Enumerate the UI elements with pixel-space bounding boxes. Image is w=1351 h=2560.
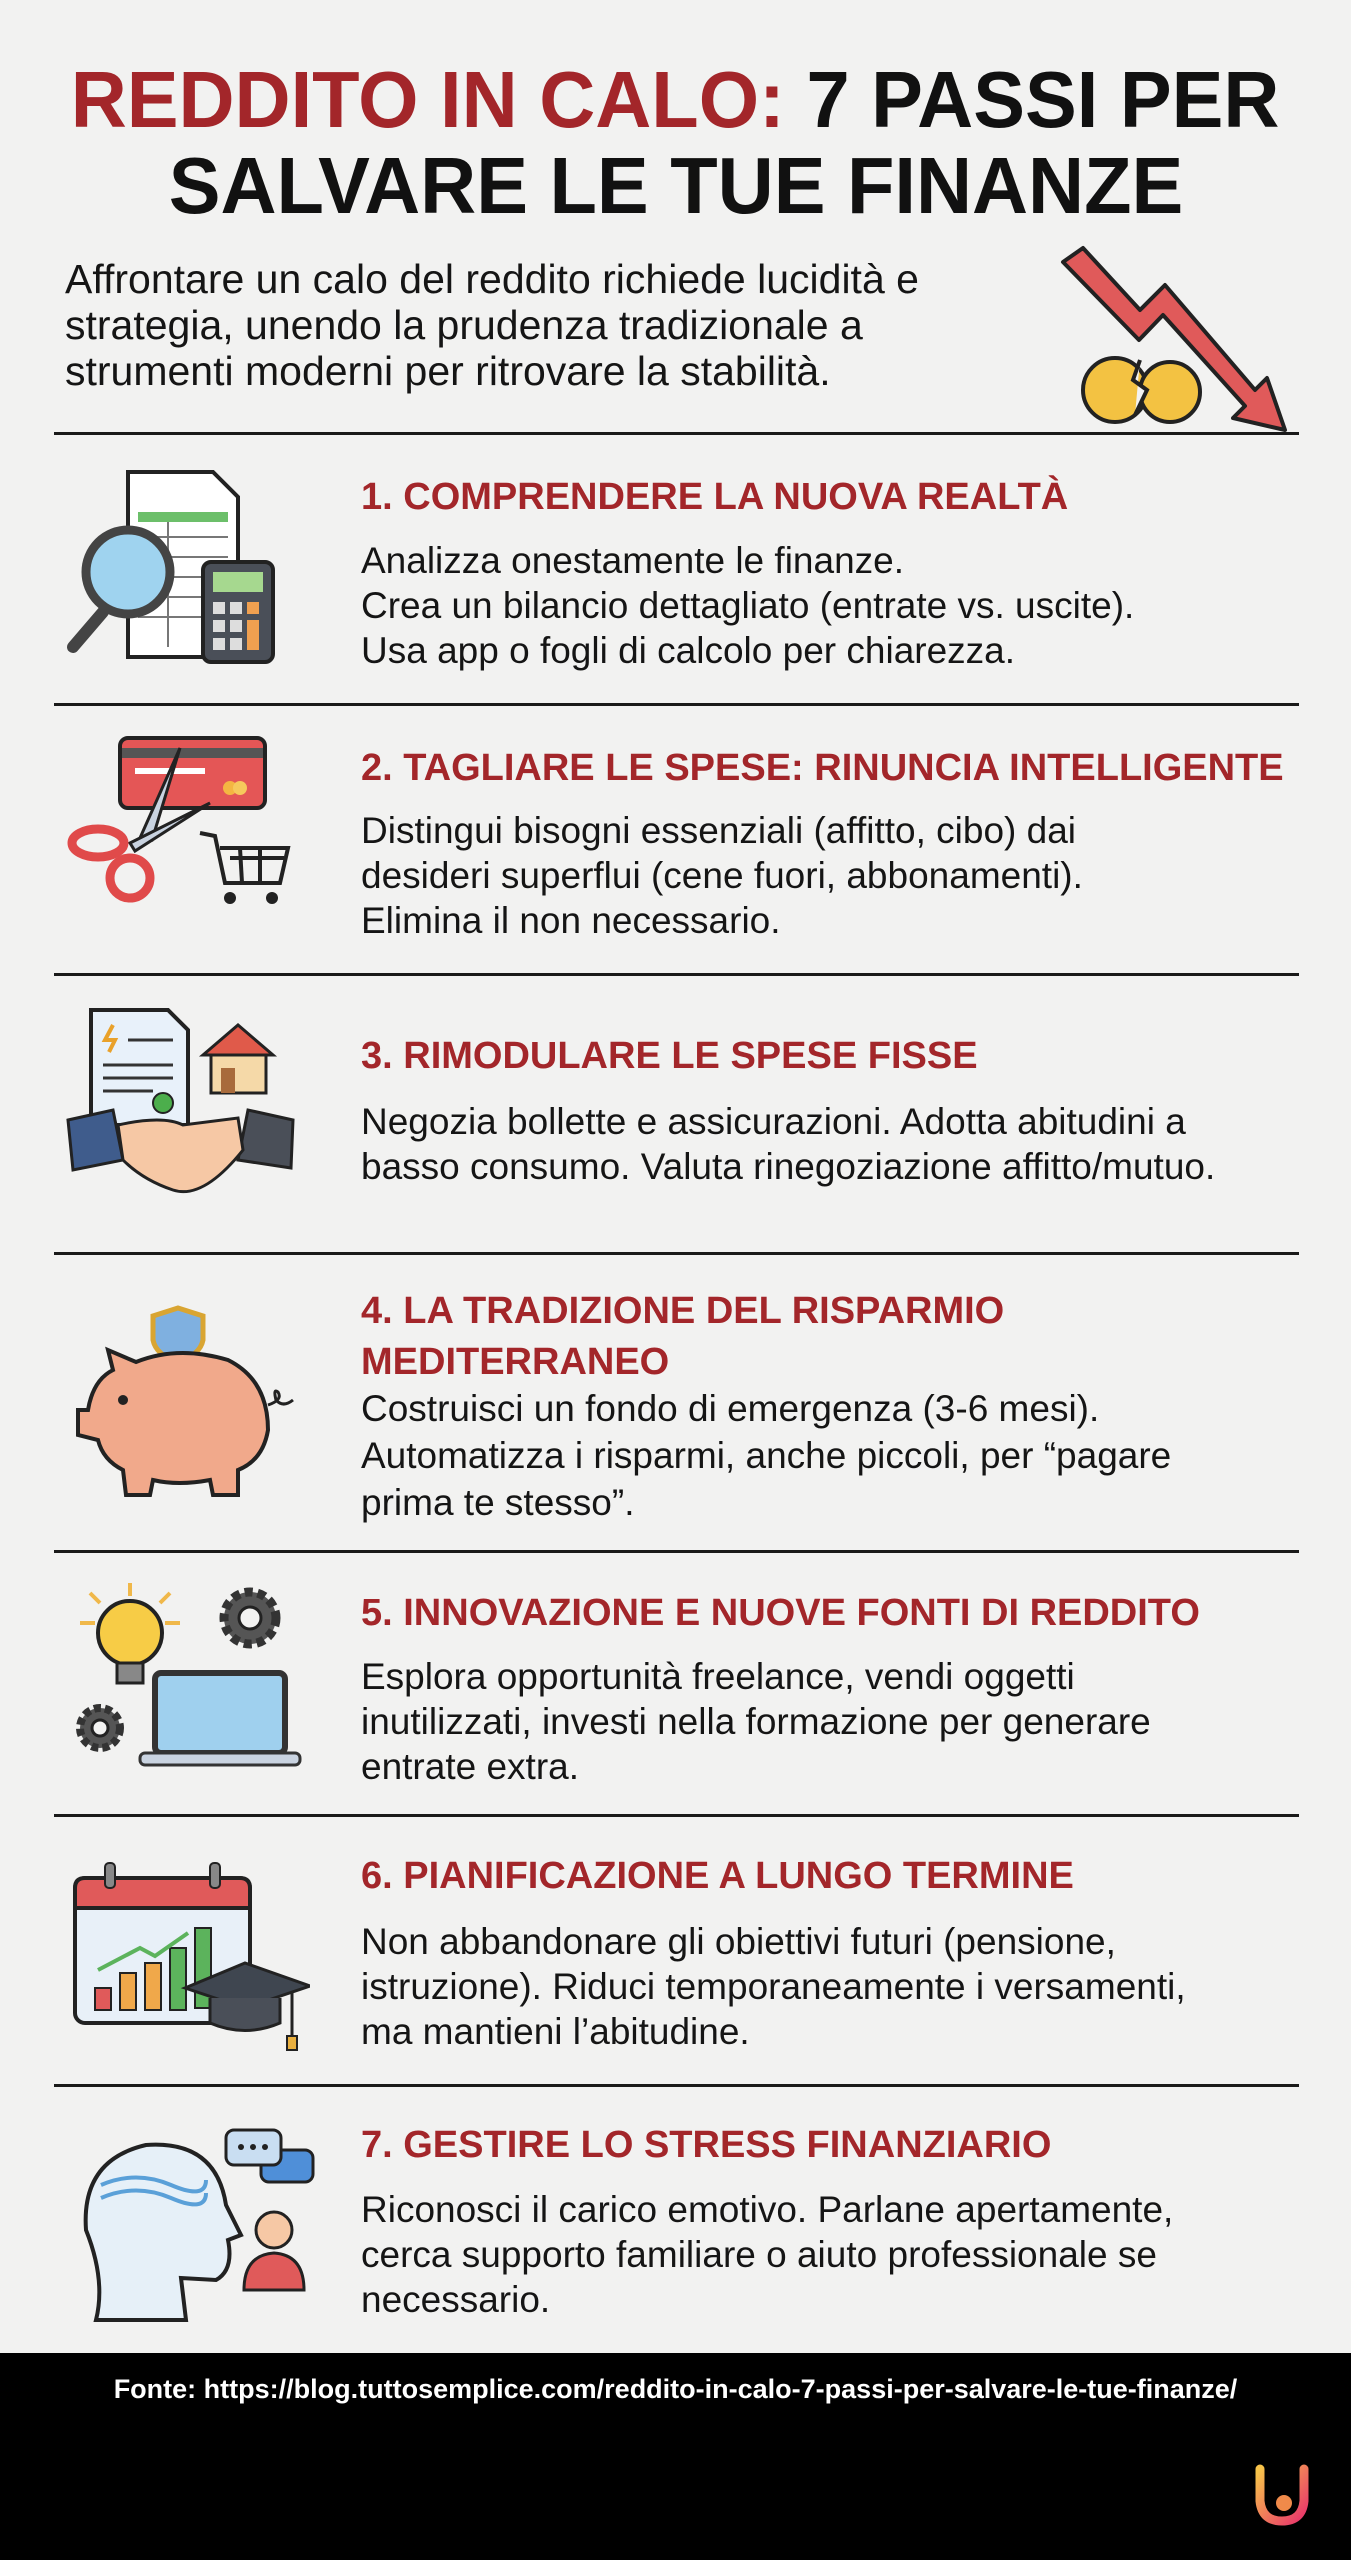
- text 6: istruzione). Riduci temporaneamente i versamenti,: [361, 1966, 1186, 2007]
- text 3: Negozia bollette e assicurazioni. Adotta abitudini a: [361, 1101, 1186, 1142]
- text 1: Crea un bilancio dettagliato (entrate vs. uscite).: [361, 585, 1134, 626]
- text 5: inutilizzati, investi nella formazione per generare: [361, 1701, 1151, 1742]
- text 3: [361, 1101, 1215, 1187]
- icon: bill house handshake: [66, 1008, 295, 1194]
- heading 7: 7. GESTIRE LO STRESS FINANZIARIO: [361, 2124, 1051, 2166]
- heading 2: 2. TAGLIARE LE SPESE: RINUNCIA INTELLIGENTE: [361, 747, 1284, 789]
- title: REDDITO IN CALO: 7 PASSI PER: [71, 55, 1280, 144]
- intro text: [65, 256, 919, 394]
- icon: falling arrow and broken coin: [1060, 246, 1288, 432]
- heading 5: 5. INNOVAZIONE E NUOVE FONTI DI REDDITO: [361, 1592, 1200, 1634]
- text 1: [361, 540, 1134, 671]
- text 2: Distingui bisogni essenziali (affitto, cibo) dai: [361, 810, 1076, 851]
- title: SALVARE LE TUE FINANZE: [168, 141, 1183, 230]
- icon: credit card scissors cart: [68, 736, 290, 904]
- text 4: prima te stesso”.: [361, 1482, 634, 1523]
- heading 1: 1. COMPRENDERE LA NUOVA REALTÀ: [361, 476, 1068, 518]
- heading 6: 6. PIANIFICAZIONE A LUNGO TERMINE: [361, 1855, 1074, 1897]
- title: [71, 55, 1280, 230]
- text 6: Non abbandonare gli obiettivi futuri (pensione,: [361, 1921, 1116, 1962]
- heading 4: 4. LA TRADIZIONE DEL RISPARMIO: [361, 1290, 1004, 1332]
- text 4: Automatizza i risparmi, anche piccoli, per “pagare: [361, 1435, 1171, 1476]
- text 6: [361, 1921, 1186, 2052]
- text 5: Esplora opportunità freelance, vendi oggetti: [361, 1656, 1075, 1697]
- heading 4: [361, 1290, 1004, 1383]
- heading 3: 3. RIMODULARE LE SPESE FISSE: [361, 1035, 978, 1077]
- text 7: cerca supporto familiare o aiuto professionale se: [361, 2234, 1157, 2275]
- icon: lightbulb gears laptop: [76, 1583, 302, 1766]
- source text: Fonte: https://blog.tuttosemplice.com/reddito-in-calo-7-passi-per-salvare-le-tue-finanze/: [114, 2374, 1237, 2404]
- heading 4: MEDITERRANEO: [361, 1341, 669, 1383]
- intro text: strumenti moderni per ritrovare la stabilità.: [65, 348, 831, 394]
- text 7: [361, 2189, 1173, 2320]
- text 2: desideri superflui (cene fuori, abbonamenti).: [361, 855, 1083, 896]
- icon: calendar chart graduation cap: [73, 1862, 310, 2051]
- text 7: necessario.: [361, 2279, 550, 2320]
- text 4: Costruisci un fondo di emergenza (3-6 mesi).: [361, 1388, 1099, 1429]
- text 5: [361, 1656, 1151, 1787]
- text 7: Riconosci il carico emotivo. Parlane apertamente,: [361, 2189, 1173, 2230]
- icon: head, speech bubbles, person: [84, 2128, 314, 2322]
- text 2: [361, 810, 1083, 941]
- text 1: Analizza onestamente le finanze.: [361, 540, 904, 581]
- intro text: Affrontare un calo del reddito richiede lucidità e: [65, 256, 919, 302]
- logo: [1256, 2464, 1308, 2526]
- text 1: Usa app o fogli di calcolo per chiarezza.: [361, 630, 1015, 671]
- text 3: basso consumo. Valuta rinegoziazione affitto/mutuo.: [361, 1146, 1215, 1187]
- text 5: entrate extra.: [361, 1746, 579, 1787]
- footer: [0, 2353, 1351, 2560]
- text 2: Elimina il non necessario.: [361, 900, 781, 941]
- intro text: strategia, unendo la prudenza tradizionale a: [65, 302, 863, 348]
- icon: spreadsheet magnifier calculator: [67, 470, 275, 664]
- text 4: [361, 1388, 1171, 1523]
- icon: piggy bank with shield: [76, 1305, 294, 1497]
- text 6: ma mantieni l’abitudine.: [361, 2011, 750, 2052]
